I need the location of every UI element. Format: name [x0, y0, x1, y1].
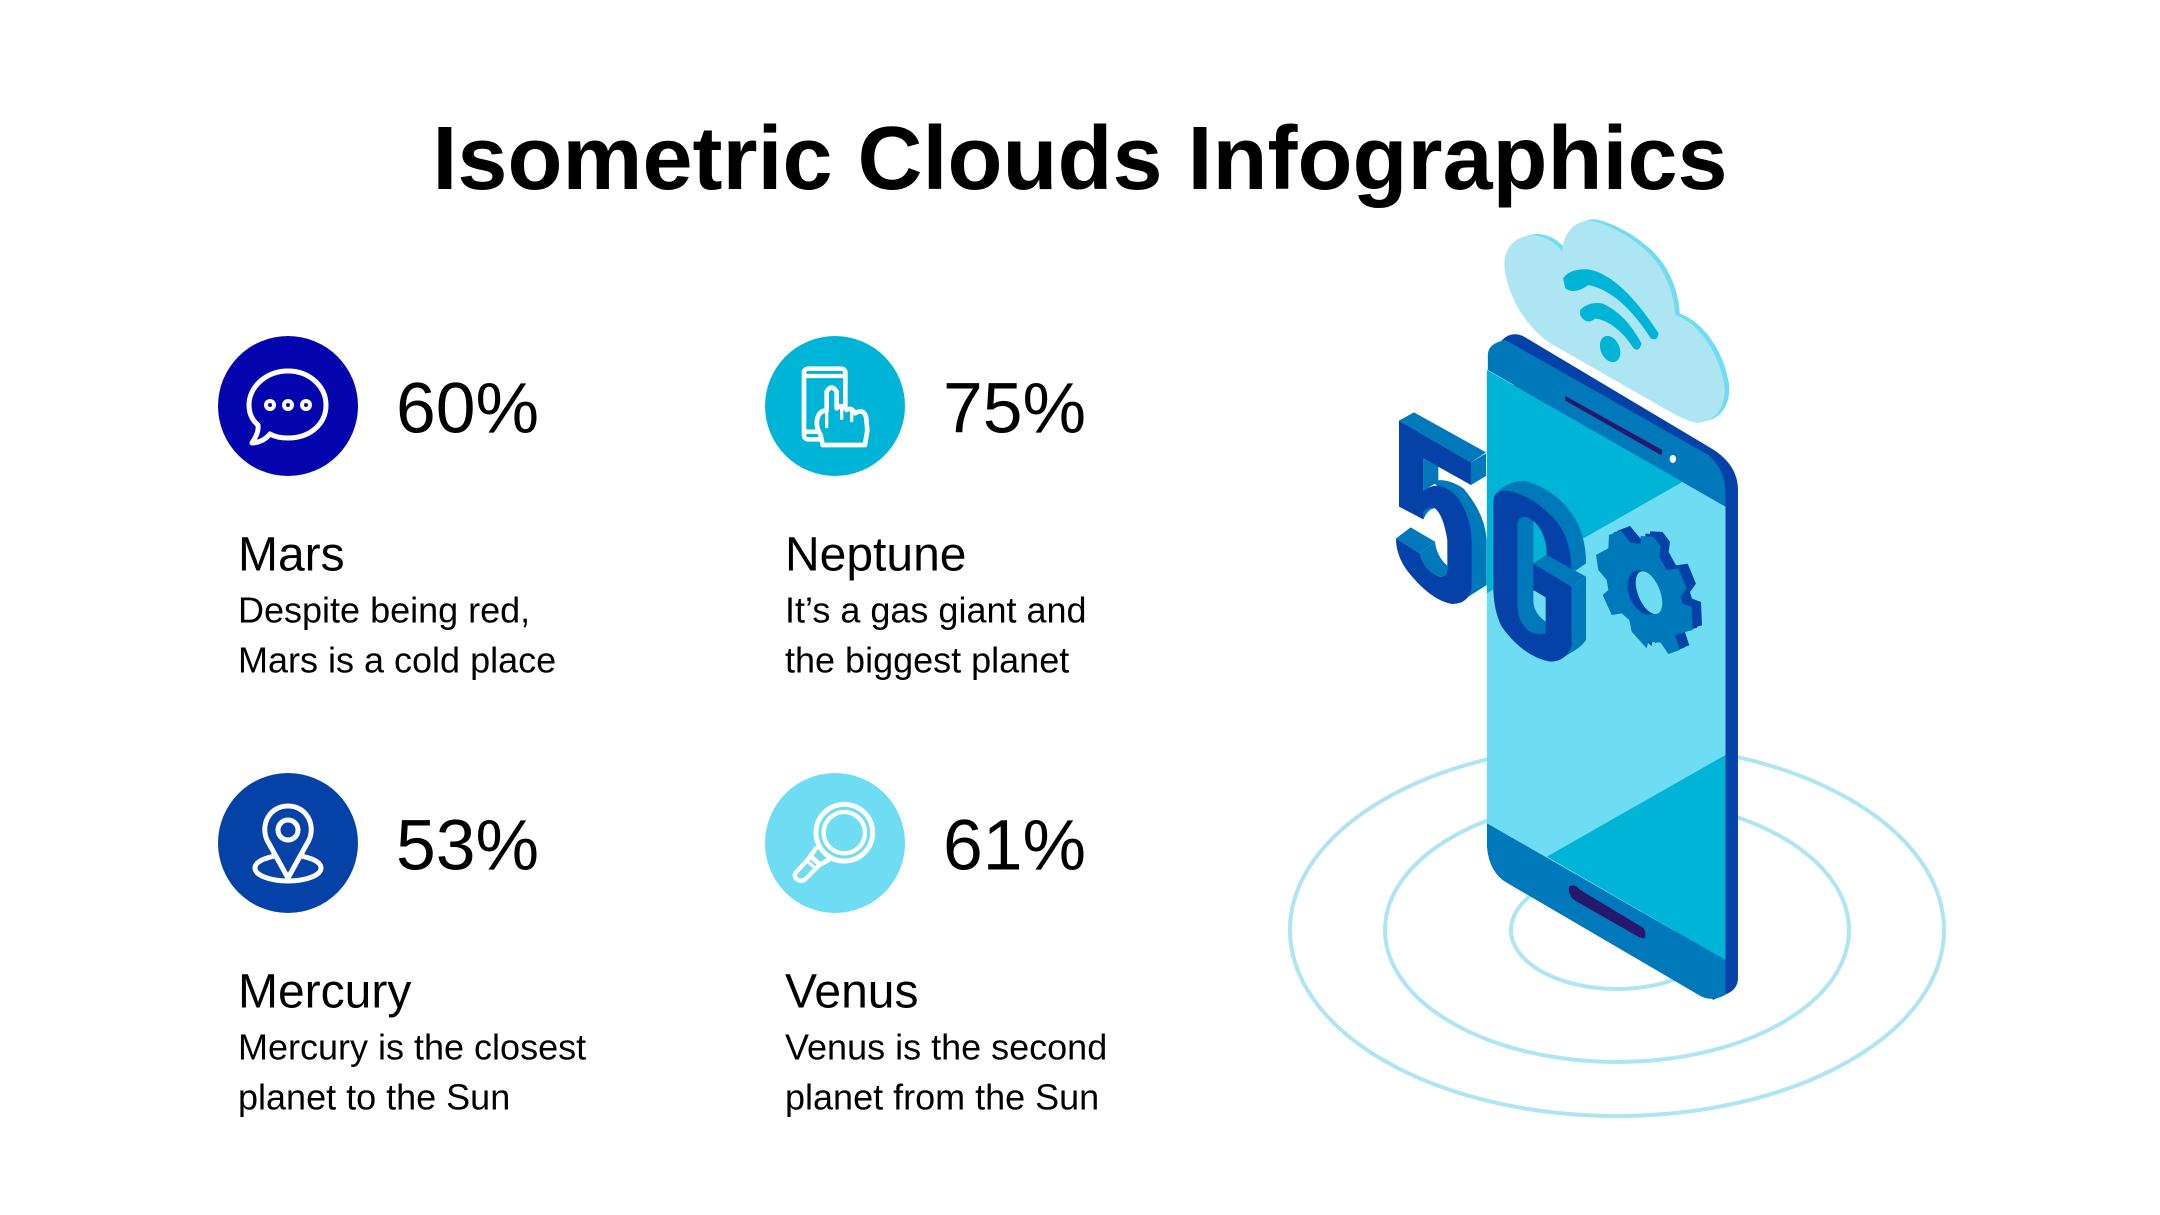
phone body — [1487, 334, 1738, 1000]
phone and cloud artwork — [1487, 219, 1738, 1000]
heading: Mercury: Mercury — [238, 966, 411, 1018]
signal rings — [1290, 744, 1944, 1116]
text: Venus description: Venus is the second — [785, 1026, 1107, 1068]
stat: 60%: 60% — [396, 368, 539, 448]
stat: 53%: 53% — [396, 806, 539, 886]
figure: G — [1493, 481, 1586, 662]
heading: Neptune: Neptune — [785, 528, 966, 582]
stat: 75%: 75% — [943, 368, 1086, 448]
icon: gear — [1596, 526, 1702, 654]
text: Mars description: Mars is a cold place — [238, 640, 556, 680]
icon: phone touch — [765, 336, 905, 476]
icon: magnifier — [765, 773, 905, 913]
text: Neptune description: It’s a gas giant and — [785, 590, 1087, 630]
heading: Venus: Venus — [785, 966, 918, 1018]
panel: Venus — [765, 773, 1107, 1118]
heading: Mars: Mars — [238, 528, 345, 582]
panel: Neptune — [765, 336, 1087, 680]
illustration: isometric 5G phone — [1290, 219, 1944, 1116]
text: Mercury description: planet to the Sun — [238, 1076, 510, 1118]
title: Isometric Clouds Infographics — [432, 109, 1728, 209]
text: Mars description: Despite being red, — [238, 590, 530, 630]
icon: map pin — [218, 773, 358, 913]
text: Venus description: planet from the Sun — [785, 1076, 1099, 1118]
panel: Mercury — [218, 773, 586, 1118]
icon: wifi cloud — [1504, 219, 1729, 423]
figure: 5 — [1396, 412, 1487, 604]
text: Mercury description: Mercury is the closest — [238, 1026, 586, 1068]
stat: 61%: 61% — [943, 806, 1086, 886]
5G and gear artwork — [1396, 412, 1702, 662]
panel: Mars — [218, 336, 556, 680]
icon: chat bubble — [218, 336, 358, 476]
text: Neptune description: the biggest planet — [785, 640, 1069, 680]
